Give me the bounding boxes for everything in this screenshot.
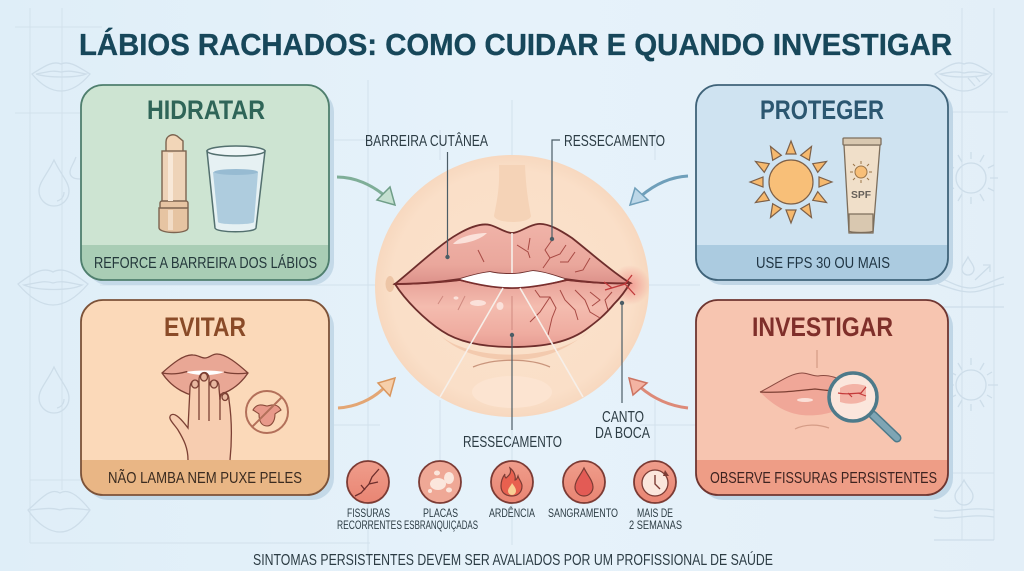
symptom: placas esbranquicadas: PLACAS xyxy=(423,508,458,520)
heading: hidratar: HIDRATAR xyxy=(147,95,265,125)
cracks xyxy=(478,238,635,335)
caption: investigar: OBSERVE FISSURAS PERSISTENTES xyxy=(710,470,937,487)
mouth line xyxy=(395,280,630,288)
nose xyxy=(494,165,531,222)
symptom: ardencia xyxy=(489,461,535,520)
icon: lips and hand xyxy=(162,354,248,460)
label: barreira cutanea: BARREIRA CUTÂNEA xyxy=(365,133,489,150)
icon: lips under magnifier xyxy=(760,350,897,438)
icon: water glass xyxy=(207,146,265,232)
arrow: hidratar to lips xyxy=(337,177,395,205)
icon: no licking xyxy=(246,391,288,433)
background lip and drop sketches, left xyxy=(18,63,90,532)
symptom: fissuras recorrentes: FISSURAS xyxy=(347,508,390,520)
label: ressecamento bottom: RESSECAMENTO xyxy=(463,434,562,451)
panel: investigar xyxy=(696,300,953,500)
upper lip xyxy=(395,224,630,284)
icon: sunscreen tube xyxy=(843,138,881,233)
panel: hidratar xyxy=(81,85,334,285)
symptom: sangramento: SANGRAMENTO xyxy=(548,508,618,520)
face circle xyxy=(375,155,649,417)
symptom: placas esbranquicadas xyxy=(404,461,478,532)
panel: proteger xyxy=(696,85,953,285)
arrow: proteger to lips xyxy=(630,176,688,205)
label: ressecamento top: RESSECAMENTO xyxy=(564,133,665,150)
lower lip xyxy=(395,280,630,347)
label line: canto da boca xyxy=(620,301,624,403)
symptom: sangramento xyxy=(548,461,618,520)
symptom: fissuras recorrentes xyxy=(337,461,402,532)
teeth xyxy=(460,271,565,288)
label line: ressecamento bottom xyxy=(510,333,514,430)
caption: hidratar: REFORCE A BARREIRA DOS LÁBIOS xyxy=(94,253,317,272)
tube label: SPF xyxy=(851,190,871,201)
symptom: mais de 2 semanas: 2 SEMANAS xyxy=(629,520,682,532)
caption: proteger: USE FPS 30 OU MAIS xyxy=(756,255,890,272)
footer note: SINTOMAS PERSISTENTES DEVEM SER AVALIADOS POR UM PROFISSIONAL DE SAÚDE xyxy=(253,550,773,569)
symptom: mais de 2 semanas: MAIS DE xyxy=(637,508,673,520)
central lips diagram xyxy=(375,140,650,430)
icon: lip balm xyxy=(159,135,188,232)
lip corners xyxy=(386,276,394,292)
panel: evitar xyxy=(81,300,334,500)
arrow: investigar to lips xyxy=(629,378,688,408)
symptom: fissuras recorrentes: RECORRENTES xyxy=(337,520,402,532)
symptom: ardencia: ARDÊNCIA xyxy=(489,507,535,520)
label line: barreira cutanea xyxy=(445,152,450,259)
background sun, skin and drop sketches, right xyxy=(934,63,1004,540)
label line: ressecamento top xyxy=(550,140,560,241)
label: canto da boca: CANTO xyxy=(602,409,644,426)
caption: evitar: NÃO LAMBA NEM PUXE PELES xyxy=(108,467,302,487)
symptom: placas esbranquicadas: ESBRANQUIÇADAS xyxy=(404,520,478,532)
label: canto da boca: DA BOCA xyxy=(595,425,651,442)
lip highlights xyxy=(453,233,504,310)
label: canto da boca xyxy=(595,409,651,442)
symptom: mais de 2 semanas xyxy=(629,461,682,532)
white divider lines xyxy=(440,233,583,397)
icon: sun xyxy=(750,141,832,223)
chin shadow and crease xyxy=(440,330,590,360)
arrow: evitar to lips xyxy=(338,378,395,408)
heading: proteger: PROTEGER xyxy=(760,95,884,125)
title: LÁBIOS RACHADOS: COMO CUIDAR E QUANDO INVESTIGAR xyxy=(79,27,952,62)
heading: investigar: INVESTIGAR xyxy=(752,312,893,342)
heading: evitar: EVITAR xyxy=(164,312,246,342)
